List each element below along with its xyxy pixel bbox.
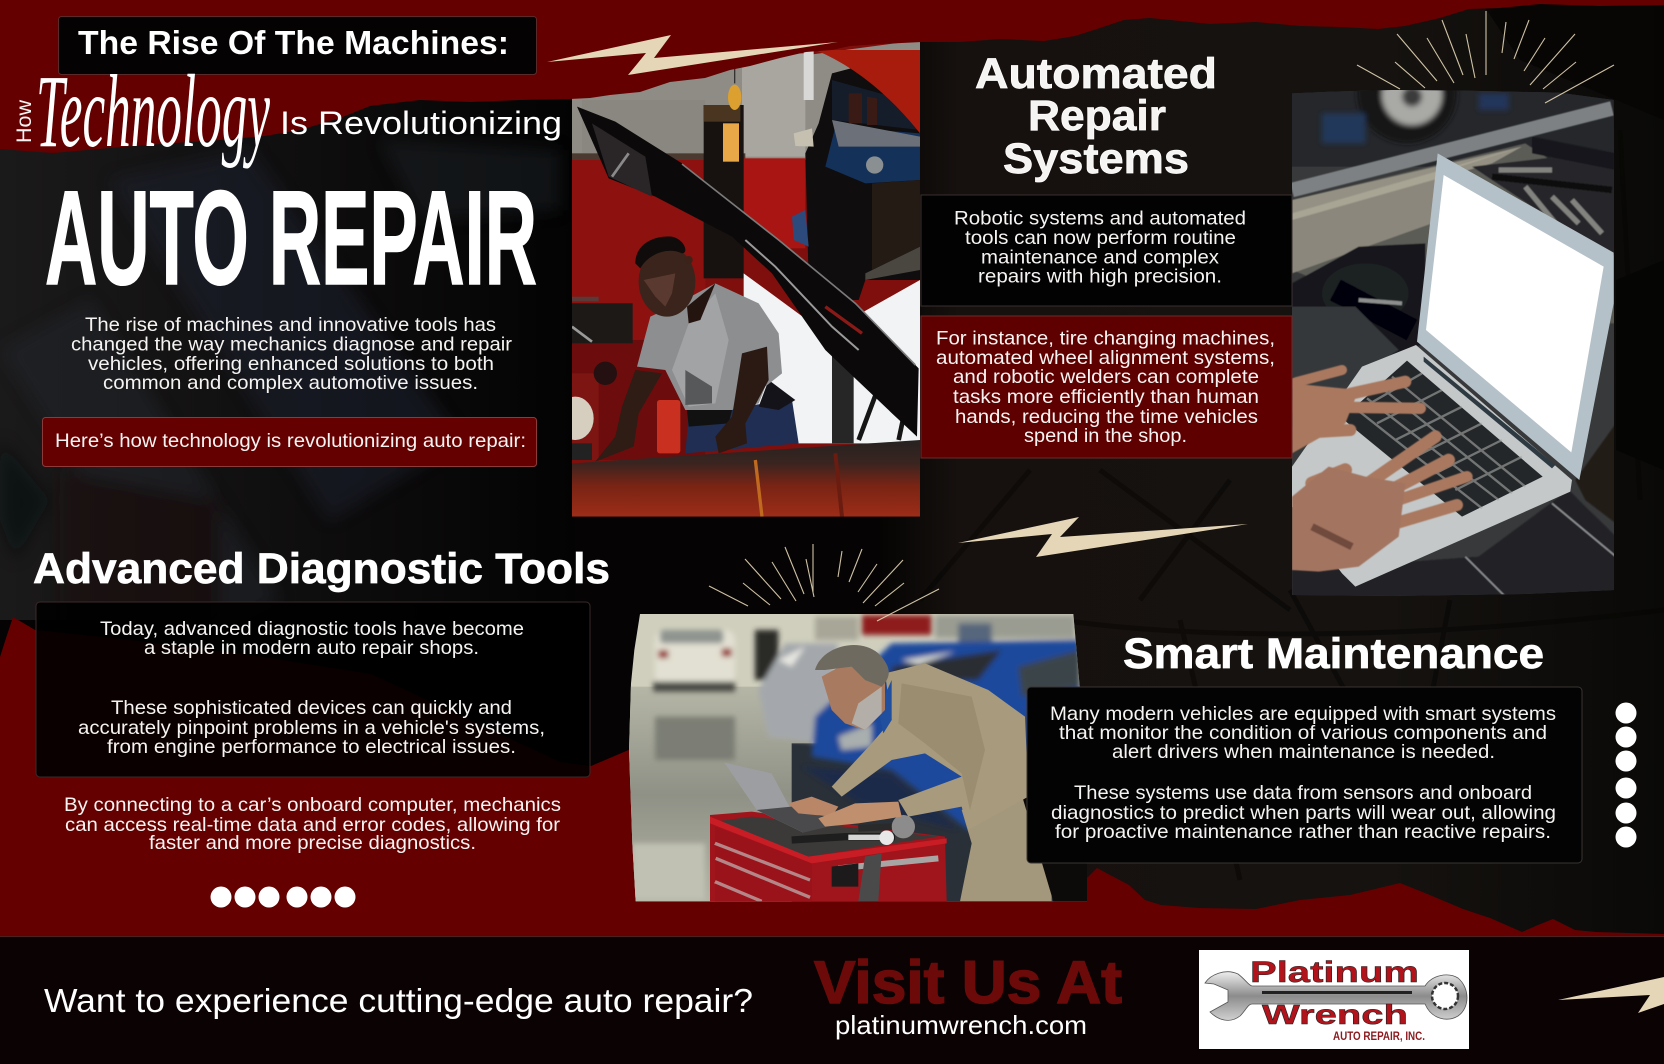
title: auto repair: AUTO REPAIR xyxy=(45,164,537,313)
panel: smart maintenance: that monitor the condition of various components and xyxy=(1059,722,1547,744)
logo: platinum wrench: Wrench xyxy=(1262,999,1408,1030)
panel: robotic systems xyxy=(921,195,1292,306)
logo: platinum wrench: AUTO REPAIR, INC. xyxy=(1333,1029,1425,1043)
panel: robotic systems: repairs with high precision. xyxy=(978,266,1222,288)
panel: tire changing machines: hands, reducing the time vehicles xyxy=(955,406,1258,428)
jacket and body xyxy=(832,663,1028,830)
heading: smart maintenance: Smart Maintenance xyxy=(1123,630,1544,678)
title: rise of the machines xyxy=(58,16,536,74)
tools xyxy=(792,815,915,845)
text: onboard computer: faster and more precise diagnostics. xyxy=(149,832,476,854)
intro paragraph: vehicles, offering enhanced solutions to both xyxy=(88,353,494,375)
panel: tire changing machines: spend in the shop. xyxy=(1024,425,1187,447)
panel: diagnostic tools: from engine performance to electrical issues. xyxy=(107,736,516,758)
panel: diagnostic tools xyxy=(36,602,590,777)
logo: platinum wrench xyxy=(1199,950,1469,1049)
panel: diagnostic tools: Today, advanced diagnostic tools have become xyxy=(100,618,524,640)
lightning bolt 2 xyxy=(958,517,1248,557)
text: onboard computer: By connecting to a car’s onboard computer, mechanics xyxy=(64,794,561,816)
panel: tire changing machines xyxy=(921,316,1292,458)
panel: diagnostic tools: accurately pinpoint problems in a vehicle's systems, xyxy=(78,717,545,739)
intro paragraph: common and complex automotive issues. xyxy=(103,372,478,394)
blurred garage background xyxy=(632,615,1080,900)
photo: mechanic with laptop and red tool cart xyxy=(625,610,1095,905)
laptop xyxy=(724,762,829,832)
callout: here's how xyxy=(42,418,536,466)
footer: call to action: Want to experience cutting-edge auto repair? xyxy=(44,982,753,1019)
intro paragraph: The rise of machines and innovative tools has xyxy=(85,314,496,336)
logo: platinum wrench: Platinum xyxy=(1250,956,1419,989)
panel: smart maintenance: These systems use data from sensors and onboard xyxy=(1074,782,1532,804)
icon: wrench xyxy=(1205,972,1467,1020)
subtitle: how technology is revolutionizing xyxy=(13,54,562,170)
intro paragraph: changed the way mechanics diagnose and repair xyxy=(71,334,513,356)
upper wall xyxy=(572,40,920,163)
panel: robotic systems: maintenance and complex xyxy=(981,246,1219,268)
panel: tire changing machines: automated wheel alignment systems, xyxy=(936,347,1275,369)
intro paragraph xyxy=(71,314,513,394)
hands xyxy=(1292,370,1467,572)
man xyxy=(595,236,799,462)
open hood xyxy=(577,107,919,437)
text: onboard computer: can access real-time data and error codes, allowing for xyxy=(65,814,561,836)
head xyxy=(815,645,889,730)
panel: diagnostic tools: These sophisticated devices can quickly and xyxy=(111,697,512,719)
panel: robotic systems: Robotic systems and automated xyxy=(954,208,1246,230)
pants xyxy=(960,798,1087,902)
heading: automated repair systems: Repair xyxy=(1028,92,1166,140)
red swoosh xyxy=(815,50,920,133)
pendant lamp xyxy=(728,68,741,110)
car front xyxy=(572,440,920,517)
footer: visit us at: Visit Us At xyxy=(814,949,1122,1016)
panel: smart maintenance xyxy=(1027,687,1582,863)
lightning bolt 1 xyxy=(547,35,838,75)
white window xyxy=(744,273,920,443)
lightning bolt 3 xyxy=(1558,977,1664,1013)
title: rise of the machines: The Rise Of The Machines: xyxy=(78,24,509,61)
subtitle: how technology is revolutionizing: How xyxy=(13,99,36,143)
panel: diagnostic tools: a staple in modern auto repair shops. xyxy=(144,637,479,659)
panel: smart maintenance: Many modern vehicles are equipped with smart systems xyxy=(1050,703,1556,725)
equipment xyxy=(572,296,680,460)
decorative dots: vertical xyxy=(1616,702,1636,848)
photo: mechanic under car hood xyxy=(557,40,920,517)
photo: hands typing on laptop xyxy=(1292,43,1616,600)
torn red band: lower xyxy=(0,617,1664,937)
panel: tire changing machines: For instance, tire changing machines, xyxy=(936,328,1275,350)
panel: smart maintenance: alert drivers when maintenance is needed. xyxy=(1112,741,1495,763)
heading: automated repair systems xyxy=(975,50,1217,183)
text: onboard computer xyxy=(64,794,561,854)
column with lit panel xyxy=(704,105,744,278)
red wall xyxy=(572,158,805,460)
panel: robotic systems: tools can now perform routine xyxy=(965,227,1236,249)
torn red band: top xyxy=(0,0,1664,153)
keyboard xyxy=(1342,361,1543,517)
laptop screen xyxy=(1417,153,1614,480)
tool cart xyxy=(710,812,947,901)
panel: tire changing machines: tasks more efficiently than human xyxy=(953,386,1259,408)
footer: visit us at: platinumwrench.com xyxy=(835,1010,1087,1040)
panel: smart maintenance: for proactive maintenance rather than reactive repairs. xyxy=(1055,821,1551,843)
heading: automated repair systems: Automated xyxy=(975,50,1217,98)
laptop base xyxy=(1292,345,1572,587)
footer bar xyxy=(0,936,1664,1064)
subtitle: how technology is revolutionizing: Technology xyxy=(36,54,270,170)
sunburst: lower centre xyxy=(709,544,939,621)
decorative dots: horizontal xyxy=(210,886,356,908)
lifted car xyxy=(792,50,920,300)
subtitle: how technology is revolutionizing: Is Revolutionizing xyxy=(280,105,562,141)
heading: automated repair systems: Systems xyxy=(1003,135,1189,183)
panel: tire changing machines: and robotic welders can complete xyxy=(953,366,1259,388)
panel: smart maintenance: diagnostics to predict when parts will wear out, allowing xyxy=(1051,802,1556,824)
heading: advanced diagnostic tools: Advanced Diagnostic Tools xyxy=(33,545,610,593)
hands on keyboard xyxy=(788,797,902,827)
sunburst: top right xyxy=(1357,11,1614,103)
callout: here's how: Here’s how technology is revolutionizing auto repair: xyxy=(55,430,526,452)
